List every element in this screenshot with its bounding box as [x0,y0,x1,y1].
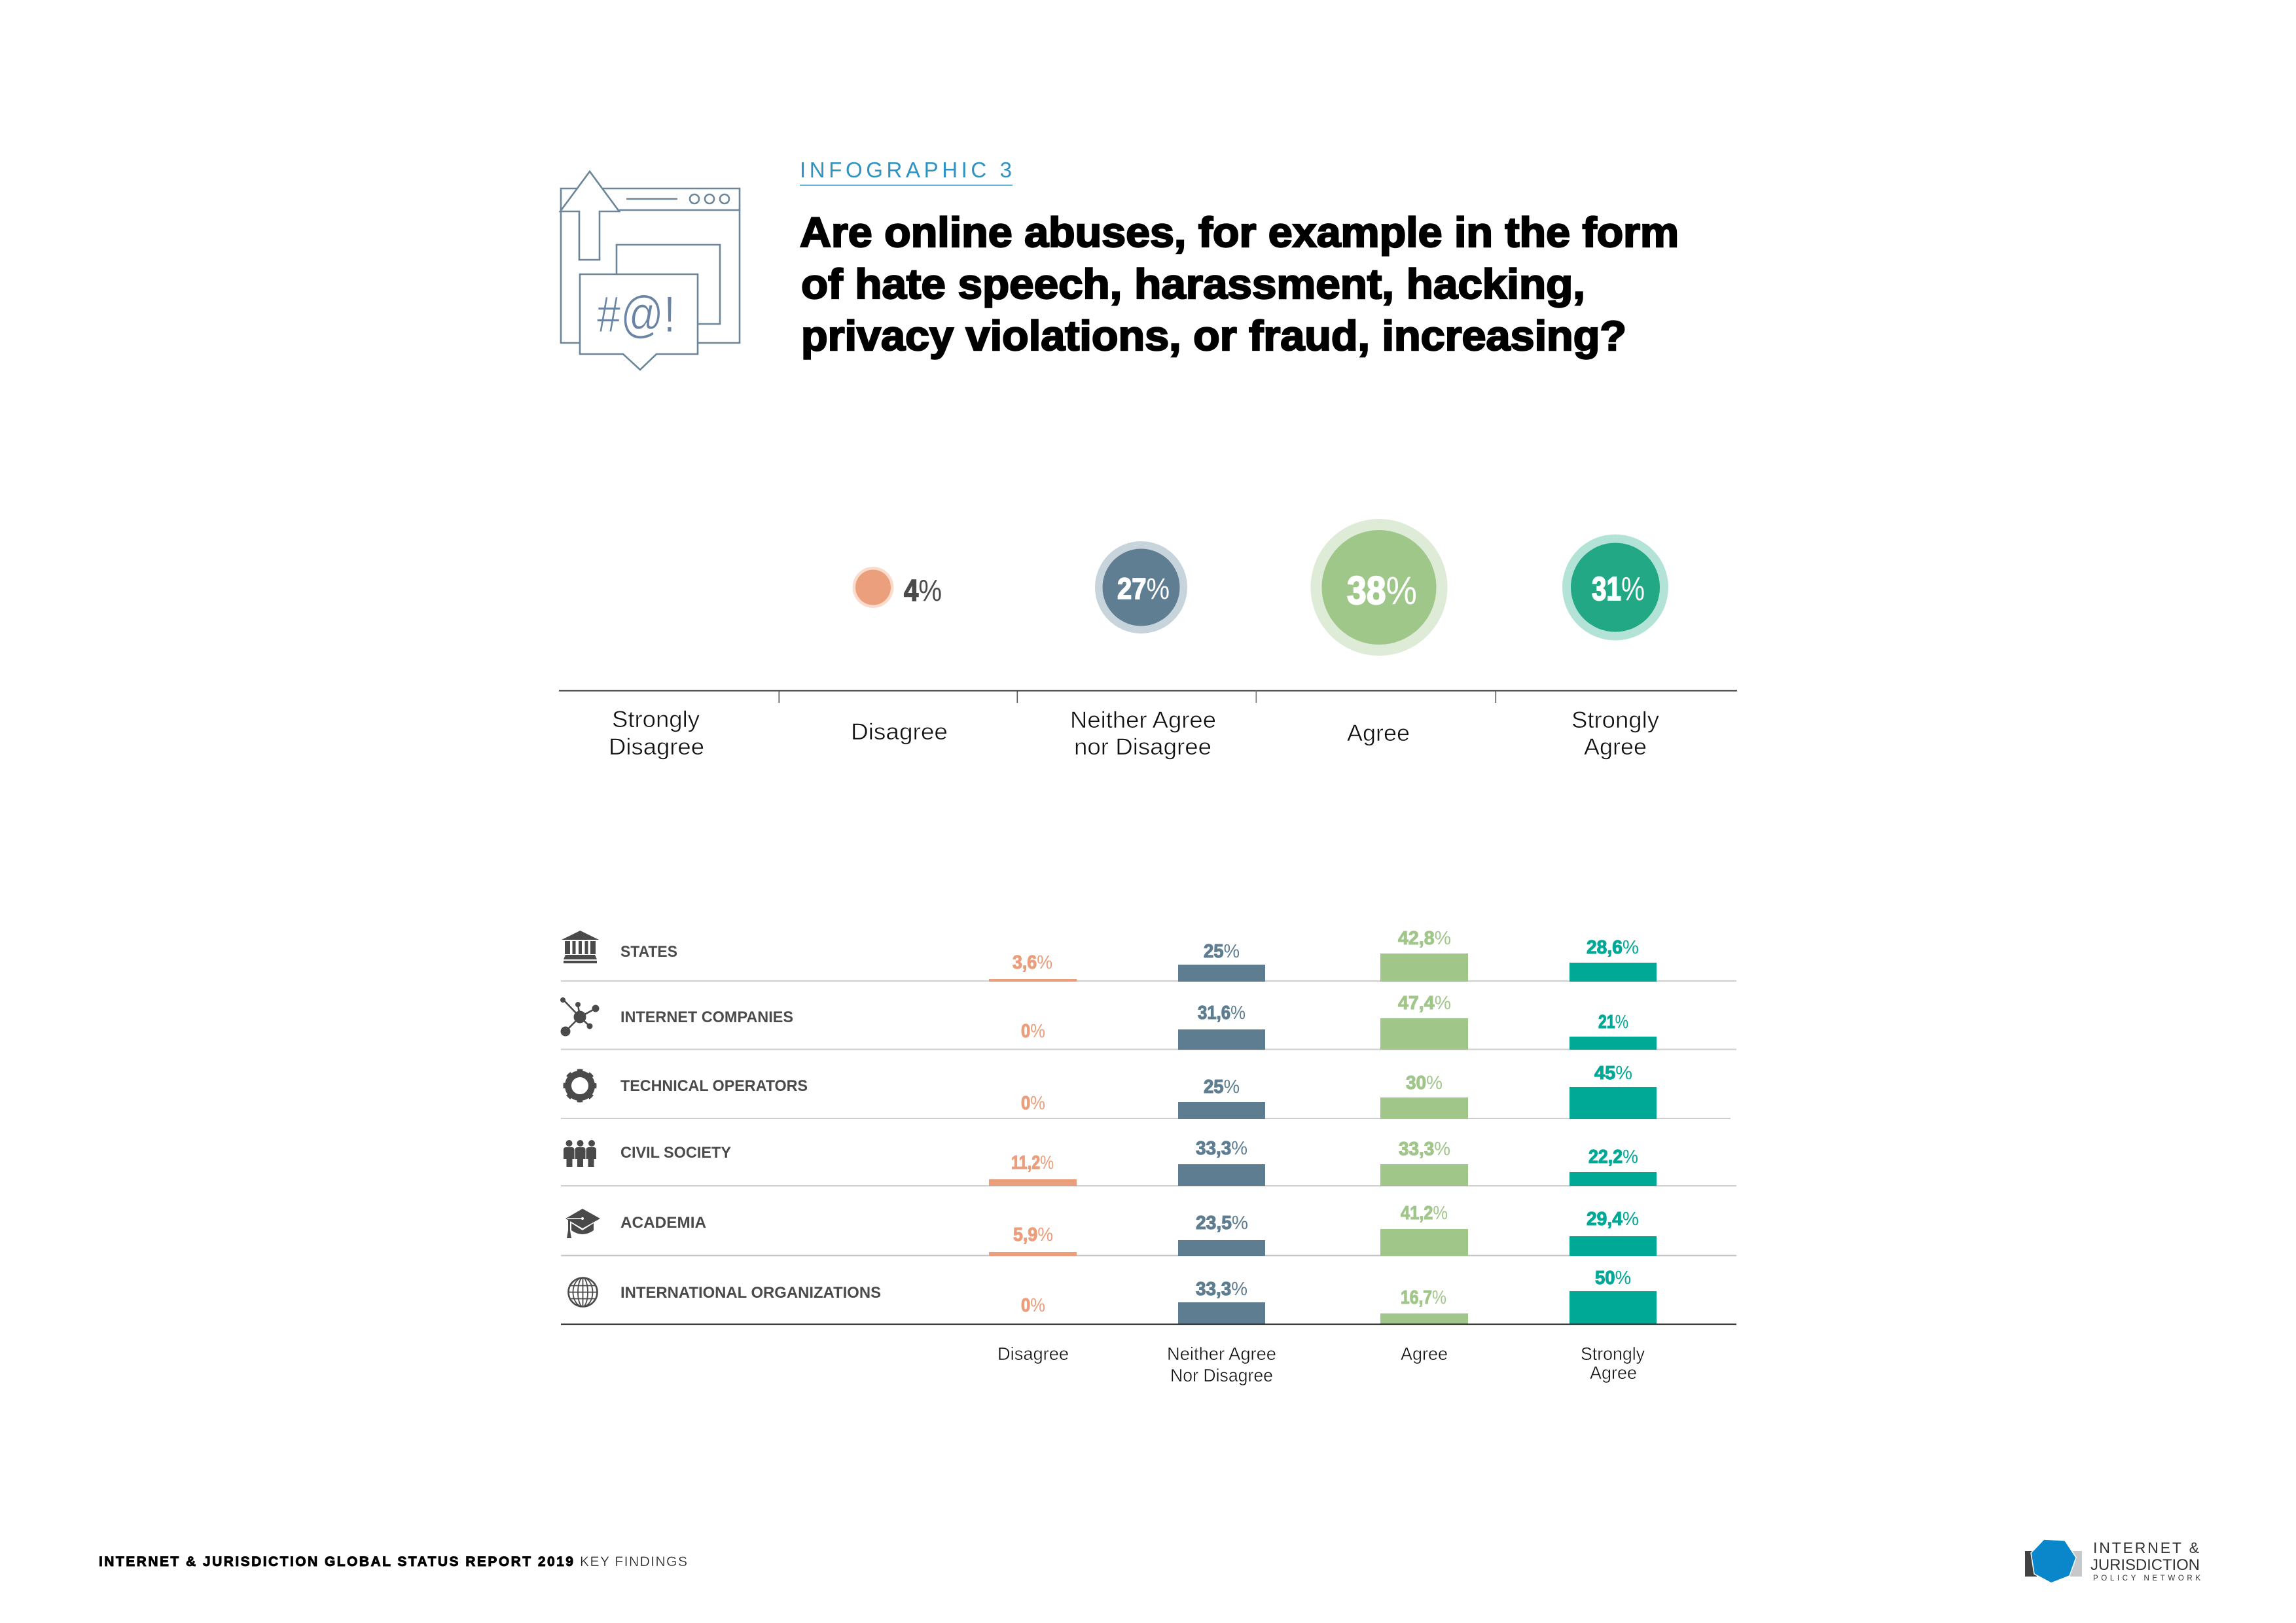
bars and values: 50% [1595,1268,1631,1289]
bars and values: 0% [1021,1295,1045,1316]
title [800,209,1679,359]
logo: Internet and Jurisdiction Policy Network [2025,1539,2200,1583]
bars and values: 0% [1021,1021,1045,1042]
bars and values: 33,3% [1399,1139,1450,1160]
bars and values: 30% [1406,1073,1443,1094]
bars and values: 11,2% [1011,1152,1054,1173]
bubble: agree 38%: 38% [1347,569,1417,613]
row label: CIVIL SOCIETY [620,1144,731,1162]
bars and values: 21% [1598,1012,1628,1033]
bars and values: 47,4% [1398,993,1451,1014]
title: Are online abuses, for example in the form [800,209,1679,256]
icon: browser window with arrow and speech bubble: #@! [597,285,675,343]
column labels: Agree [1590,1363,1637,1383]
logo: Internet and Jurisdiction Policy Network: POLICY NETWORK [2093,1575,2200,1582]
row divider lines [561,980,1736,1257]
row: states [562,928,1657,982]
chart baseline [561,1323,1736,1325]
bars and values: 25% [1204,941,1240,962]
bars and values: 45% [1594,1063,1632,1084]
row: civil society [564,1138,1657,1186]
scale labels: nor Disagree [1074,734,1211,760]
column labels: Strongly [1581,1344,1645,1364]
section label: INFOGRAPHIC 3 [800,158,1012,182]
bubble: disagree 4% [852,567,942,608]
bars and values: 0% [1021,1093,1045,1114]
bars and values [989,1203,1657,1256]
column labels: Agree [1401,1344,1448,1364]
scale labels: Disagree [851,719,948,745]
bubble: strongly agree 31% [1562,534,1668,640]
scale labels: Agree [1347,721,1410,746]
logo: Internet and Jurisdiction Policy Network: INTERNET & [2093,1539,2199,1556]
row: internet companies [560,993,1657,1050]
row label: INTERNET COMPANIES [620,1008,793,1026]
bars and values: 33,3% [1196,1279,1247,1300]
scale labels: Neither Agree [1070,707,1216,733]
bars and values [1021,993,1657,1050]
logo: Internet and Jurisdiction Policy Network: JURISDICTION [2090,1556,2200,1574]
title: of hate speech, harassment, hacking, [801,260,1585,308]
bubble: agree 38% [1310,519,1448,656]
bars and values: 42,8% [1398,928,1451,949]
bars and values: 5,9% [1013,1224,1053,1245]
row label: TECHNICAL OPERATORS [620,1077,808,1095]
row label: STATES [620,943,677,961]
column labels [997,1344,1645,1385]
bars and values: 41,2% [1401,1203,1448,1224]
bars and values [1021,1063,1657,1119]
bubble: disagree 4%: 4% [904,573,942,607]
row label: INTERNATIONAL ORGANIZATIONS [620,1284,881,1302]
scale labels: Strongly [1571,707,1660,733]
bubble: neither agree nor disagree 27% [1095,541,1187,633]
row: international organizations [568,1268,1657,1325]
bars and values: 23,5% [1196,1213,1248,1234]
icon: three people [564,1140,596,1167]
bars and values: 29,4% [1587,1209,1639,1230]
row: academia [565,1203,1657,1256]
scale labels: Agree [1584,734,1647,760]
title: privacy violations, or fraud, increasing? [801,312,1626,359]
bars and values [989,928,1657,982]
icon: bank building [562,931,599,963]
bars and values [989,1138,1657,1186]
bars and values: 31,6% [1198,1003,1246,1024]
scale axis [559,690,1737,703]
icon: gear [565,1071,595,1101]
bars and values: 22,2% [1588,1147,1638,1168]
bubble: neither agree nor disagree 27%: 27% [1117,572,1170,605]
icon: globe [568,1277,597,1306]
column labels: Neither Agree [1167,1344,1276,1364]
icon: graduation cap [565,1209,600,1238]
bars and values: 16,7% [1401,1287,1446,1308]
bubble: strongly agree 31%: 31% [1592,570,1645,607]
bars and values: 3,6% [1013,952,1052,973]
scale labels: Disagree [609,734,704,760]
bubble chart: overall results [852,519,1668,656]
icon: browser window with arrow and speech bubble [560,171,740,370]
bars and values [1021,1268,1657,1325]
scale labels [609,707,1660,760]
bars and values: 25% [1204,1077,1240,1097]
column labels: Nor Disagree [1170,1365,1273,1385]
bars and values: 28,6% [1587,937,1639,958]
scale labels: Strongly [612,707,700,732]
footer text: KEY FINDINGS [580,1554,687,1569]
row label: ACADEMIA [620,1214,706,1232]
column labels: Disagree [997,1344,1069,1364]
bars and values: 33,3% [1196,1138,1247,1159]
row: technical operators [565,1063,1657,1119]
footer text: INTERNET & JURISDICTION GLOBAL STATUS REPORT 2019 [99,1554,573,1569]
icon: network nodes [560,997,600,1037]
